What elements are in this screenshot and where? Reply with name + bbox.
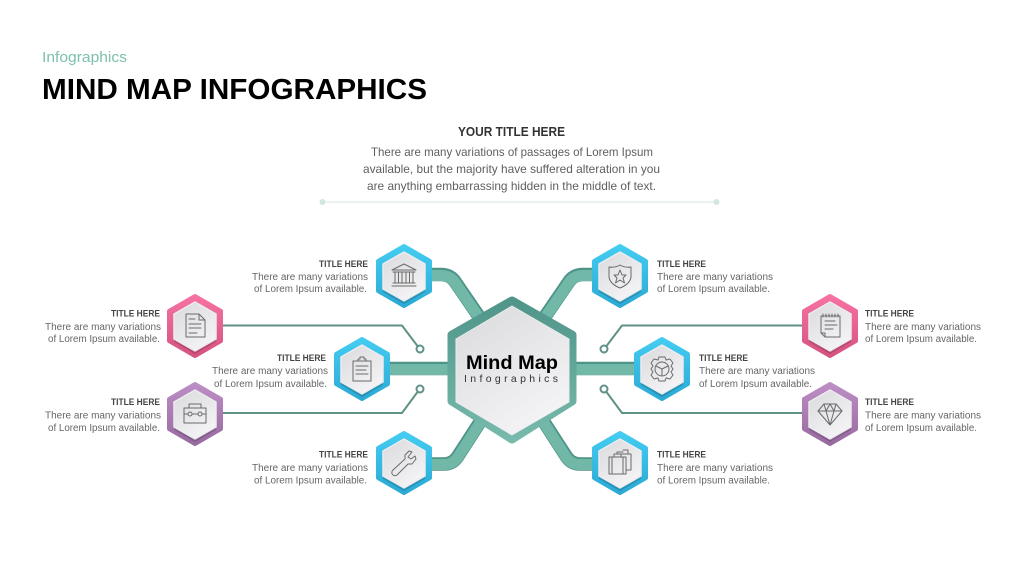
icon: shield xyxy=(609,265,631,288)
node: briefcase xyxy=(169,384,221,444)
text: bottom left xyxy=(252,450,368,486)
text: outer left purple: There are many variations xyxy=(45,410,161,422)
text: top left: TITLE HERE xyxy=(319,259,368,269)
text: middle right xyxy=(699,353,815,390)
node: luggage xyxy=(594,433,646,493)
thick connector branches xyxy=(388,274,636,464)
text: middle right: There are many variations xyxy=(699,366,815,377)
text: middle left: TITLE HERE xyxy=(277,353,326,363)
node: diamond xyxy=(804,384,856,444)
text: top left: of Lorem Ipsum available. xyxy=(254,284,367,295)
text: outer right pink xyxy=(865,308,981,345)
text: outer right purple: of Lorem Ipsum available. xyxy=(865,423,977,434)
text: bottom left: TITLE HERE xyxy=(319,450,368,460)
icon: bank xyxy=(392,264,416,286)
text: bottom right: There are many variations xyxy=(657,463,773,474)
node: notepad xyxy=(804,296,856,356)
text: bottom right: of Lorem Ipsum available. xyxy=(657,476,770,486)
text: middle right: TITLE HERE xyxy=(699,353,748,363)
intro text block: There are many variations of passages of Lorem Ipsum xyxy=(371,145,653,159)
icon: diamond xyxy=(818,404,842,425)
node: gear xyxy=(636,339,688,399)
text: bottom right xyxy=(657,450,773,486)
text: outer right purple xyxy=(865,397,981,434)
text: bottom right: TITLE HERE xyxy=(657,450,706,460)
intro text block: are anything embarrassing hidden in the middle of text. xyxy=(367,179,656,193)
text: outer left pink xyxy=(45,308,161,345)
text: top right: There are many variations xyxy=(657,272,773,283)
intro text block: YOUR TITLE HERE xyxy=(458,124,565,139)
divider with end dots xyxy=(320,199,720,205)
title: MIND MAP INFOGRAPHICS xyxy=(42,74,427,106)
text: outer left purple: TITLE HERE xyxy=(111,397,160,407)
text: outer right pink: of Lorem Ipsum available. xyxy=(865,334,977,345)
text: top right xyxy=(657,259,773,295)
central hexagon xyxy=(452,301,572,439)
node: shield xyxy=(594,246,646,306)
node: wrench xyxy=(378,433,430,493)
node: bank xyxy=(378,246,430,306)
text: outer left purple: of Lorem Ipsum available. xyxy=(48,423,160,434)
text: top left: There are many variations xyxy=(252,272,368,283)
icon: luggage xyxy=(609,450,631,474)
icon: wrench xyxy=(392,451,416,476)
icon: gear xyxy=(651,357,673,381)
text: bottom left: of Lorem Ipsum available. xyxy=(254,476,367,486)
subtitle: Infographics xyxy=(42,49,127,66)
text: top left xyxy=(252,259,368,295)
node: document xyxy=(169,296,221,356)
intro text block xyxy=(363,124,660,193)
central label: Mind Map xyxy=(466,352,558,374)
text: middle left: of Lorem Ipsum available. xyxy=(214,379,327,390)
text: top right: of Lorem Ipsum available. xyxy=(657,284,770,295)
icon: document xyxy=(186,314,205,337)
text: middle right: of Lorem Ipsum available. xyxy=(699,379,812,390)
central sublabel: Infographics xyxy=(464,373,558,385)
text: outer left pink: of Lorem Ipsum available. xyxy=(48,334,160,345)
text: outer right purple: There are many variations xyxy=(865,410,981,422)
text: middle left: There are many variations xyxy=(212,366,328,377)
text: outer left purple xyxy=(45,397,161,434)
node: clipboard xyxy=(336,339,388,399)
text: outer left pink: There are many variations xyxy=(45,322,161,333)
text: outer right purple: TITLE HERE xyxy=(865,397,914,407)
icon: briefcase xyxy=(184,404,206,423)
text: outer right pink: There are many variations xyxy=(865,322,981,333)
icon: notepad xyxy=(821,314,840,337)
text: middle left xyxy=(212,353,328,390)
thin connectors with end circles xyxy=(222,326,802,413)
text: outer left pink: TITLE HERE xyxy=(111,308,160,318)
text: bottom left: There are many variations xyxy=(252,463,368,474)
icon: clipboard xyxy=(353,357,371,381)
text: outer right pink: TITLE HERE xyxy=(865,308,914,318)
intro text block: available, but the majority have suffered alteration in you xyxy=(363,162,660,176)
text: top right: TITLE HERE xyxy=(657,259,706,269)
